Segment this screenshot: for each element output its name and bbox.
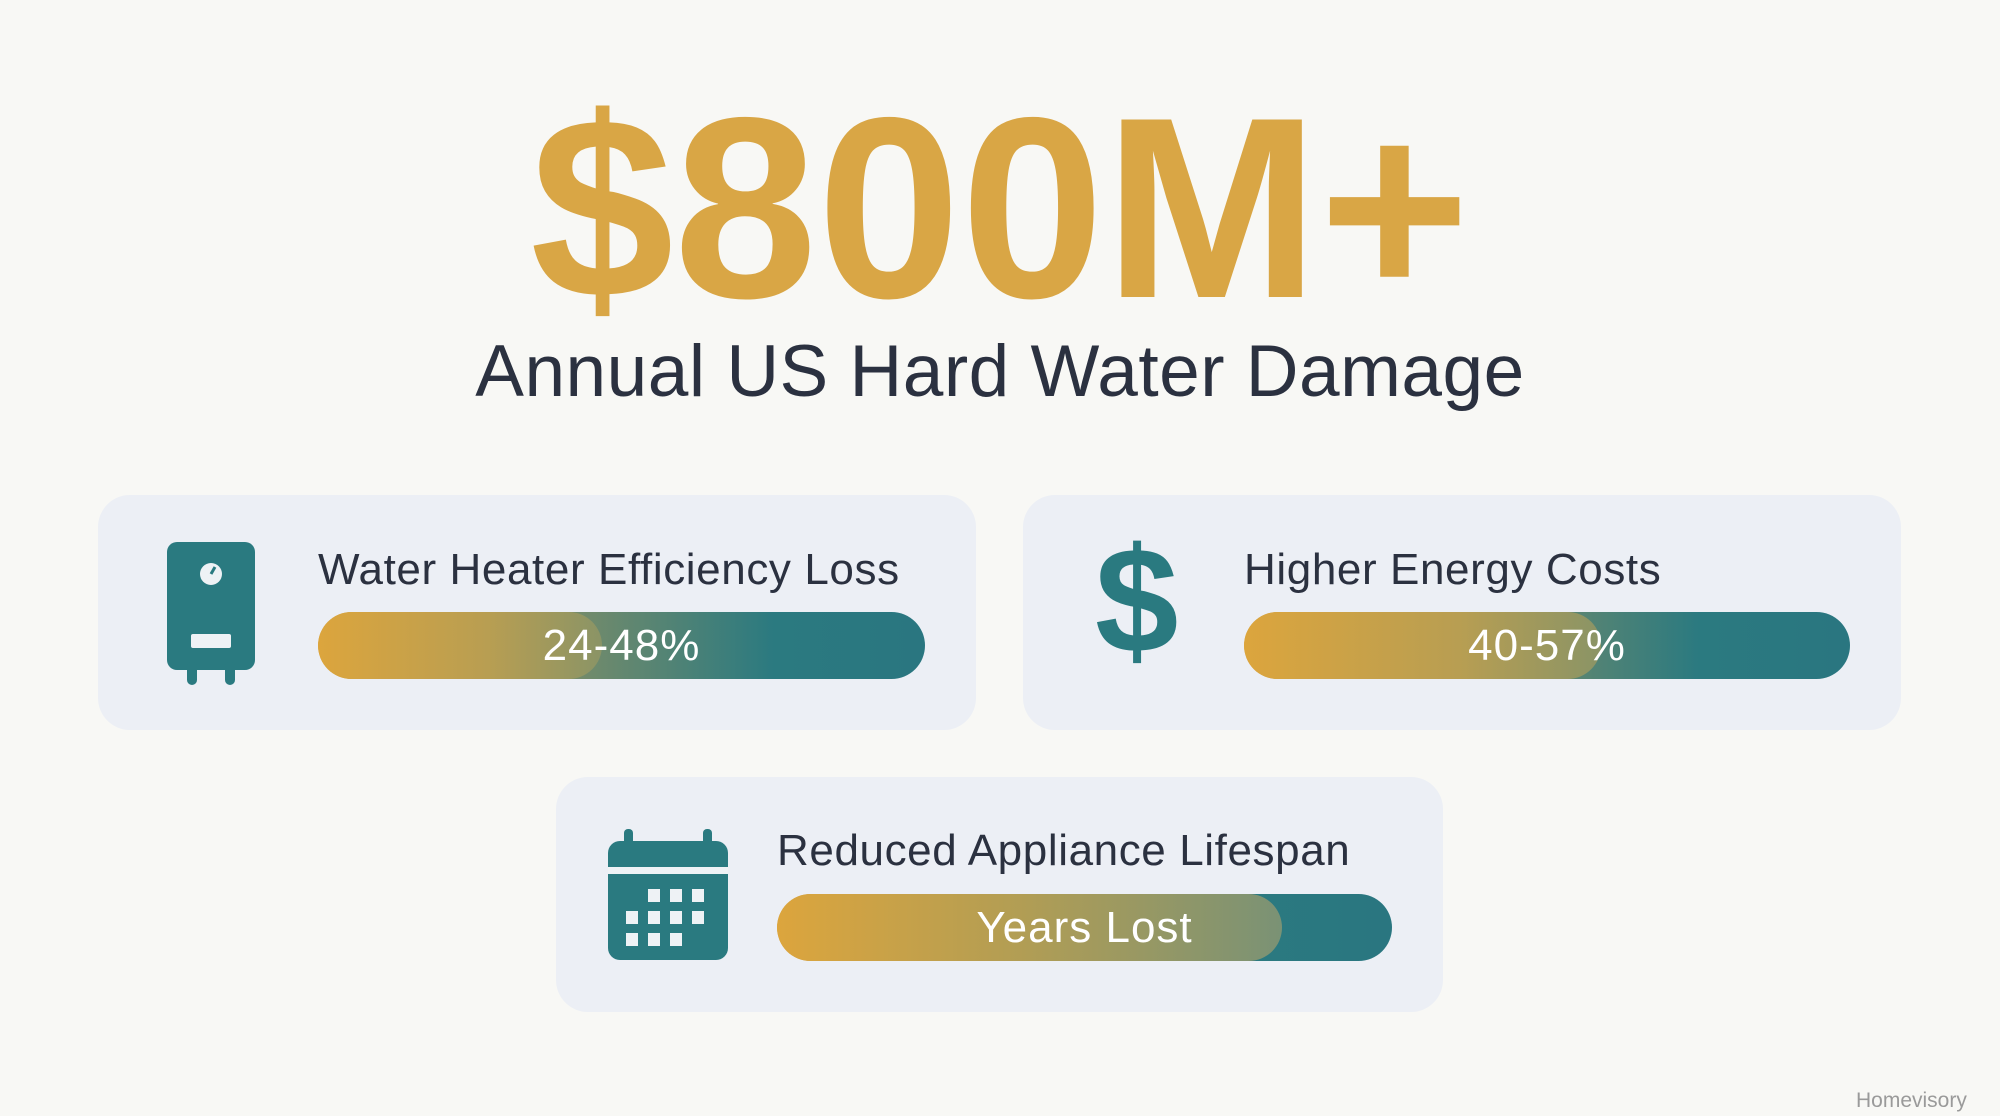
label: Higher Energy Costs	[1244, 545, 1661, 594]
bar: years lost	[777, 894, 1392, 961]
footer: brand: Homevisory	[1856, 1089, 1967, 1112]
label: Reduced Appliance Lifespan	[777, 826, 1350, 875]
bar: 24-48%: 24-48%	[543, 621, 700, 670]
bar: 40-57%: 40-57%	[1468, 621, 1626, 670]
title: $800M+: $800M+	[530, 63, 1470, 352]
icon: dollar sign: $	[1095, 516, 1178, 684]
label: Water Heater Efficiency Loss	[318, 545, 900, 594]
panel: reduced appliance lifespan	[556, 777, 1443, 1012]
bar: 24-48%	[318, 612, 925, 679]
panel: water heater efficiency	[98, 495, 976, 730]
icon: water heater	[167, 542, 255, 685]
icon: calendar	[608, 829, 728, 960]
bar: years lost: Years Lost	[976, 903, 1193, 952]
subtitle: Annual US Hard Water Damage	[475, 331, 1525, 412]
panel: higher energy costs	[1023, 495, 1901, 730]
bar: 40-57%	[1244, 612, 1850, 679]
